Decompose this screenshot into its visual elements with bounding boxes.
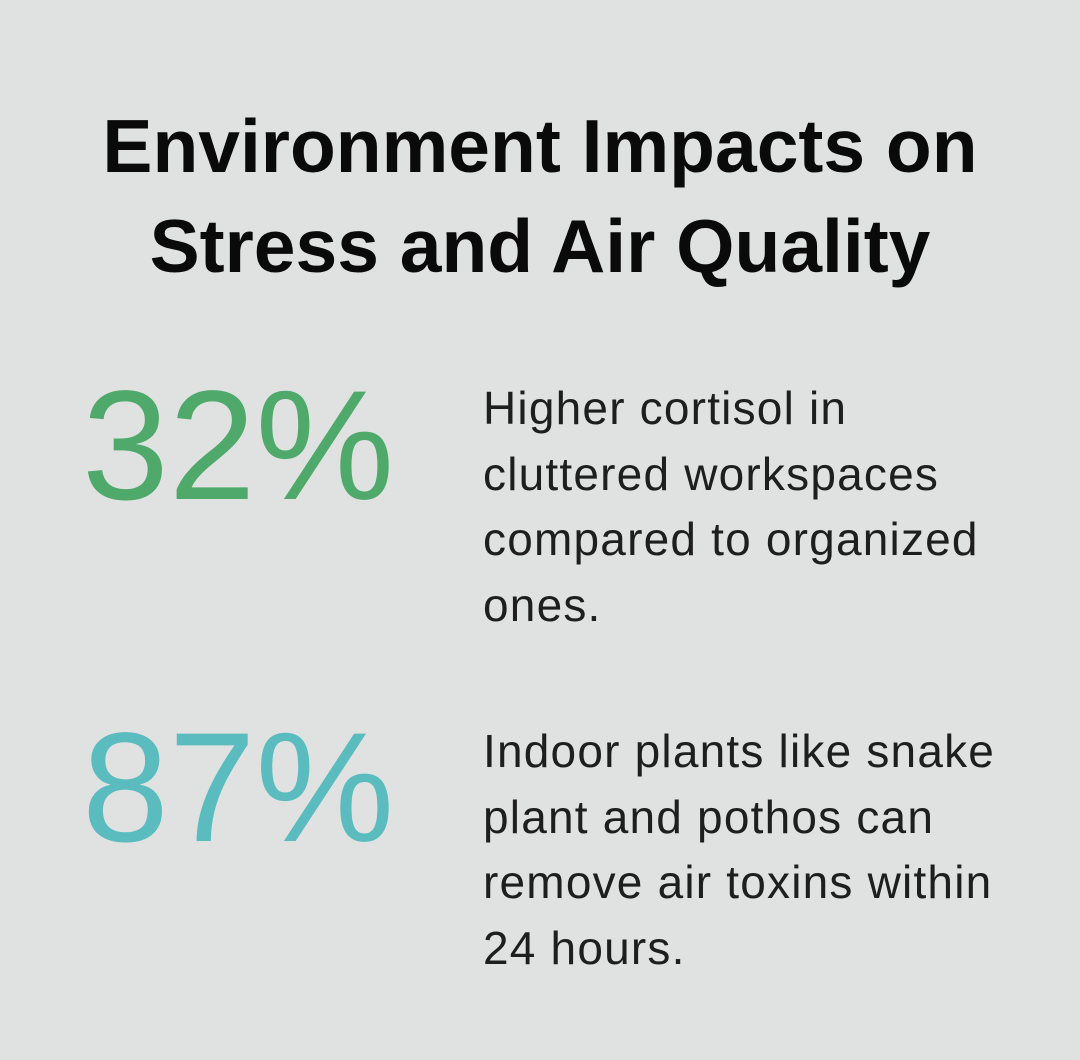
- description: cortisol: [483, 382, 979, 630]
- description: plants: 24 hours.: [483, 922, 686, 974]
- description: cortisol: Higher cortisol in: [483, 382, 847, 434]
- description: plants: [483, 725, 995, 974]
- title: Stress and Air Quality: [150, 204, 930, 288]
- stat: 32%: 32%: [82, 359, 394, 533]
- description: cortisol: ones.: [483, 578, 602, 630]
- description: cortisol: cluttered workspaces: [483, 448, 939, 500]
- description: plants: Indoor plants like snake: [483, 725, 995, 777]
- title: [102, 104, 978, 288]
- description: plants: plant and pothos can: [483, 790, 934, 842]
- description: cortisol: compared to organized: [483, 513, 979, 565]
- description: plants: remove air toxins within: [483, 856, 992, 908]
- title: Environment Impacts on: [102, 104, 978, 188]
- stat: 87%: 87%: [82, 701, 394, 875]
